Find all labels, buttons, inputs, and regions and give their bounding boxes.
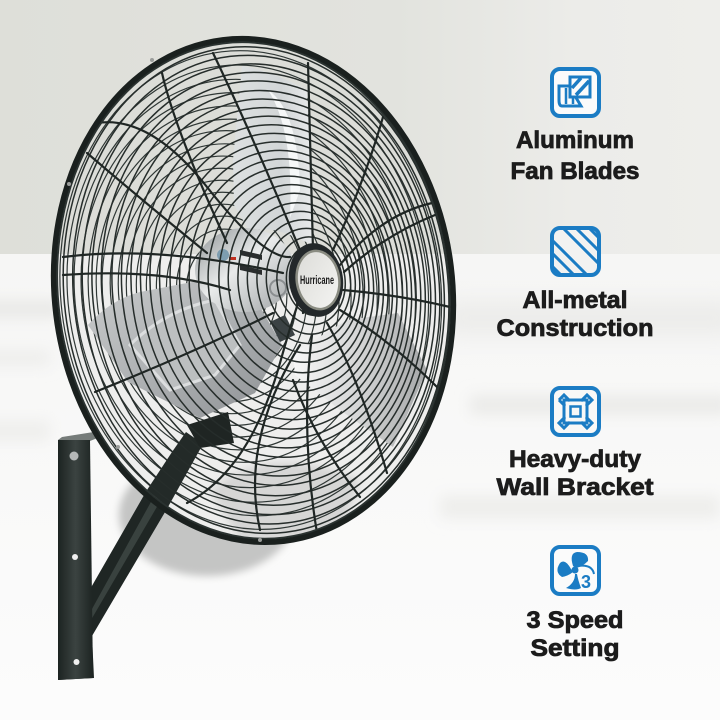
label: All-metal — [522, 287, 628, 314]
feature: aluminum fan blades — [510, 69, 640, 185]
feature: all-metal construction — [496, 228, 654, 342]
grille spokes — [63, 53, 450, 533]
rim bolts — [67, 58, 262, 542]
icon: square bracket — [552, 388, 599, 435]
feature: 3 speed setting — [526, 547, 624, 662]
icon: diagonal metal stripes — [552, 228, 599, 275]
rear grille — [59, 50, 442, 530]
feature: heavy-duty wall bracket — [496, 388, 654, 501]
feature: 3 speed setting: Setting — [530, 635, 620, 662]
label: 3 Speed — [526, 607, 624, 634]
hub badge: Hurricane — [300, 273, 334, 287]
front grille rings — [36, 24, 476, 556]
left blade inner panel — [130, 300, 240, 390]
label: Heavy-duty — [509, 446, 642, 473]
rear strut and mount — [147, 412, 234, 507]
icon: fan with number 3: 3 — [581, 572, 591, 592]
wall shadow under fan — [119, 454, 295, 576]
label: Aluminum — [516, 127, 634, 154]
hub badge — [284, 240, 348, 320]
blade: right — [293, 313, 427, 447]
blade: top — [233, 66, 313, 245]
wall bracket — [58, 431, 168, 680]
feature: heavy-duty wall bracket: Wall Bracket — [496, 474, 654, 501]
blade highlight — [268, 90, 300, 218]
feature: aluminum fan blades: Fan Blades — [510, 158, 640, 185]
outer rim — [25, 16, 482, 565]
blade: left — [88, 278, 282, 418]
feature: all-metal construction: Construction — [496, 315, 654, 342]
icon: aluminum panels — [552, 69, 599, 116]
fan interior backdrop — [58, 205, 447, 538]
fan — [50, 36, 456, 545]
motor housing — [195, 228, 295, 342]
